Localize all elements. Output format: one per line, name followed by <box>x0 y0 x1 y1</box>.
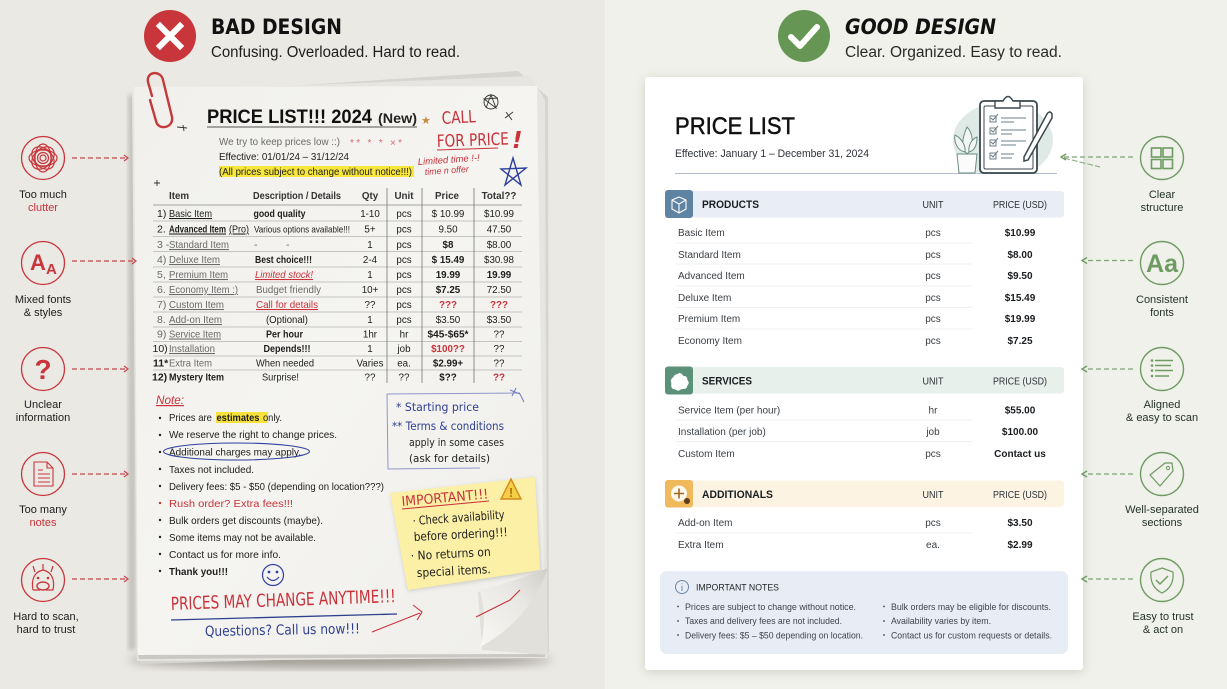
icon: smiley <box>262 564 284 586</box>
messy notes list: Thank you!!! <box>169 566 228 578</box>
product rows: pcs <box>925 336 941 347</box>
table rows: pcs <box>396 255 412 266</box>
table rows: ea. <box>397 358 411 370</box>
messy table <box>152 188 522 384</box>
clean title: PRICE LIST <box>675 113 795 140</box>
callout: sticky note <box>390 477 541 591</box>
messy subtitle block: (All prices subject to change without notice!!!) <box>219 166 412 178</box>
product rows: $9.50 <box>1007 271 1033 282</box>
callout: mixed fonts: A <box>30 250 46 275</box>
callout: terms box: * Starting price <box>396 400 479 414</box>
callout: important notes: Contact us for custom requests or details. <box>891 630 1052 642</box>
table header row: Description / Details <box>253 191 342 202</box>
product rows: $15.49 <box>1005 293 1036 304</box>
table header row: Unit <box>394 191 414 202</box>
table rows: 9) <box>157 328 166 340</box>
table rows: Various options available!!! <box>254 224 350 234</box>
table rows: pcs <box>396 300 412 311</box>
section header: services: UNIT <box>922 376 944 388</box>
table rows: ?? <box>365 372 376 384</box>
callout: well-separated sections: Well-separated <box>1125 504 1199 516</box>
section header: services <box>665 366 1064 394</box>
callout: hard to scan: hard to trust <box>17 624 75 636</box>
table rows: hr <box>400 330 409 340</box>
messy title: (New) <box>378 110 417 126</box>
callout: unclear information: ? <box>34 354 52 385</box>
table rows: 5, <box>157 269 166 281</box>
handwritten: call for price: FOR PRICE <box>436 129 509 152</box>
messy subtitle block <box>219 136 414 178</box>
callout: too much clutter <box>19 136 128 214</box>
callout: unclear information <box>16 348 128 424</box>
callout: important notes: Taxes and delivery fees are not included. <box>685 616 842 627</box>
callout: clear structure <box>1061 136 1184 214</box>
service rows: Contact us <box>994 449 1046 460</box>
table rows: $3.50 <box>487 315 512 326</box>
callout: easy to trust <box>1082 558 1194 636</box>
callout: terms box <box>387 388 524 469</box>
table header row: Qty <box>362 191 379 202</box>
callout: important notes: IMPORTANT NOTES <box>696 582 779 594</box>
table rows: 1 <box>367 315 373 326</box>
panel: messy paper price list <box>128 71 552 668</box>
messy notes list: only. <box>263 412 282 424</box>
table rows: ??? <box>490 300 508 311</box>
callout: important notes: Bulk orders may be eligible for discounts. <box>891 602 1051 613</box>
section header: products <box>665 190 1064 218</box>
callout: too much clutter: Too much <box>19 189 67 201</box>
additional rows: ea. <box>926 540 940 551</box>
table rows: Advanced Item <box>169 224 226 236</box>
product rows: pcs <box>925 250 941 261</box>
header: bad design: BAD DESIGN <box>211 15 342 39</box>
callout: sticky note: IMPORTANT!!! <box>401 486 489 510</box>
curled page corner <box>478 568 548 655</box>
service rows: Service Item (per hour) <box>678 406 780 416</box>
table rows: 2-4 <box>363 255 378 266</box>
table rows: Basic Item <box>169 208 212 220</box>
table rows: pcs <box>396 209 412 220</box>
service rows: $55.00 <box>1005 406 1036 416</box>
table rows: ?? <box>494 358 505 370</box>
product rows: Standard Item <box>678 250 741 261</box>
table rows: 8. <box>157 314 166 326</box>
callout: important notes: Availability varies by item. <box>891 616 991 627</box>
product rows: Advanced Item <box>678 271 745 282</box>
table rows: ?? <box>399 372 410 384</box>
callout: sticky note: special items. <box>416 562 491 580</box>
panel: clean price list <box>645 77 1083 672</box>
icon: clipboard and plant illustration <box>953 96 1053 173</box>
service rows: hr <box>929 406 938 416</box>
table rows <box>152 208 515 384</box>
callout: too many notes <box>19 452 128 529</box>
product rows: Economy Item <box>678 336 742 347</box>
additional rows: pcs <box>925 518 941 529</box>
messy notes list: Delivery fees: $5 - $50 (depending on location???) <box>169 481 384 493</box>
table rows: Call for details <box>256 299 318 311</box>
table rows: $8 <box>443 240 454 251</box>
table rows: Limited stock! <box>255 269 313 281</box>
table rows: Service Item <box>169 328 221 340</box>
callout: mixed fonts: & styles <box>24 307 63 319</box>
section header: additionals: UNIT <box>922 489 944 501</box>
callout: terms box: (ask for details) <box>409 452 490 465</box>
messy notes list <box>156 393 384 578</box>
callout: well-separated sections: sections <box>1142 517 1183 529</box>
table rows: good quality <box>254 208 306 220</box>
table header row: Item <box>169 191 189 202</box>
callout: clear structure: structure <box>1141 202 1183 214</box>
service rows <box>676 406 1046 460</box>
messy subtitle block: Effective: 01/01/24 – 31/12/24 <box>219 151 349 163</box>
service rows: $100.00 <box>1002 427 1039 438</box>
table rows: $ 10.99 <box>432 209 464 220</box>
table header row: Price <box>435 191 460 202</box>
table rows: pcs <box>396 270 412 281</box>
table rows: 7) <box>157 299 166 311</box>
section header: products: PRODUCTS <box>702 199 759 211</box>
table rows: 1) <box>157 208 166 220</box>
callout: consistent fonts <box>1082 242 1188 319</box>
table rows: 12) <box>152 372 167 384</box>
table rows: ?? <box>493 372 505 384</box>
messy notes list: Rush order? Extra fees!!! <box>169 498 293 510</box>
table rows: 19.99 <box>487 270 512 281</box>
handwritten: call for price <box>417 107 522 177</box>
table rows: 72.50 <box>487 285 512 296</box>
product rows: pcs <box>925 228 941 239</box>
product rows: pcs <box>925 293 941 304</box>
callout: unclear information: Unclear <box>24 399 62 411</box>
callout: unclear information: information <box>16 412 70 424</box>
table rows: 4) <box>157 254 166 266</box>
messy notes list: Prices are <box>169 412 212 424</box>
additional rows: $3.50 <box>1007 518 1033 529</box>
callout: mixed fonts: A <box>46 261 57 278</box>
table rows: 3 - <box>157 239 170 251</box>
table rows: $3.50 <box>436 315 461 326</box>
messy subtitle block: ** * * ×* <box>350 138 402 149</box>
table rows: Economy Item :) <box>169 284 238 296</box>
callout: important notes <box>660 571 1068 654</box>
table rows: 5+ <box>364 224 376 236</box>
callout: sticky note: before ordering!!! <box>413 525 508 544</box>
product rows: Deluxe Item <box>678 293 731 304</box>
icon: paper clip <box>148 73 172 127</box>
product rows: $10.99 <box>1005 228 1036 239</box>
table rows: 1 <box>367 240 373 251</box>
callout: sticky note: · Check availability <box>412 508 505 528</box>
handwritten: prices may change: Questions? Call us now!!! <box>205 621 360 640</box>
product rows <box>675 228 1036 347</box>
table rows: ?? <box>365 300 376 311</box>
table rows: Installation <box>169 343 215 355</box>
product rows: Basic Item <box>678 228 725 239</box>
header: bad design <box>144 10 460 62</box>
table rows: Add-on Item <box>169 314 222 326</box>
callout: consistent fonts: Consistent <box>1136 294 1188 306</box>
callout: aligned and easy to scan: Aligned <box>1144 399 1180 411</box>
messy notes list: Taxes not included. <box>169 464 254 476</box>
table rows: 47.50 <box>487 224 512 236</box>
table rows: - <box>286 239 290 251</box>
table rows: 9.50 <box>438 224 458 236</box>
table rows: ?? <box>494 330 505 340</box>
callout: too many notes: notes <box>30 517 57 529</box>
callout: too many notes: Too many <box>19 504 67 516</box>
section header: products: PRICE (USD) <box>993 199 1047 211</box>
callout: hard to scan: Hard to scan, <box>13 611 79 623</box>
callout: sticky note: ! <box>509 485 513 500</box>
table header row <box>169 191 516 202</box>
icon: blue star doodle <box>501 158 526 185</box>
table rows: (Pro) <box>229 224 249 236</box>
table rows: Custom Item <box>169 299 224 311</box>
handwritten: call for price: CALL <box>441 107 477 129</box>
arrow: red doodle <box>372 590 520 632</box>
callout: aligned and easy to scan: & easy to scan <box>1126 412 1198 424</box>
messy title: ★ <box>421 115 431 127</box>
header: good design <box>778 10 1062 62</box>
callout: mixed fonts: Mixed fonts <box>15 294 72 306</box>
section header: products: UNIT <box>922 199 944 211</box>
handwritten: call for price: ! <box>512 128 522 154</box>
table rows: 1hr <box>363 330 378 340</box>
table rows: $2.99+ <box>433 358 463 370</box>
table rows: 6. <box>157 284 166 296</box>
table grid <box>153 188 522 383</box>
callout: sticky note: · No returns on <box>410 545 491 563</box>
messy notes list: We reserve the right to change prices. <box>169 429 337 441</box>
service rows: pcs <box>925 449 941 460</box>
section header: additionals: ADDITIONALS <box>702 489 773 501</box>
messy notes list: Some items may not be available. <box>169 532 316 544</box>
product rows: Premium Item <box>678 314 740 325</box>
product rows: $8.00 <box>1007 250 1033 261</box>
table rows: 1-10 <box>360 209 380 220</box>
table rows: $100?? <box>431 344 465 355</box>
callout: well-separated sections <box>1082 452 1199 529</box>
table rows: When needed <box>256 358 314 370</box>
table rows: 1 <box>367 270 373 281</box>
table rows: 11* <box>153 358 169 370</box>
messy notes list: Bulk orders get discounts (maybe). <box>169 515 323 527</box>
header: good design: GOOD DESIGN <box>845 15 996 39</box>
callout: terms box: ** Terms & conditions <box>392 419 504 433</box>
table rows: $30.98 <box>484 255 515 266</box>
table rows: $8.00 <box>487 240 512 251</box>
callout: too much clutter: clutter <box>28 202 58 214</box>
table rows: Best choice!!! <box>255 254 312 266</box>
clean title <box>675 113 1057 174</box>
messy subtitle block: We try to keep prices low ::) <box>219 136 340 148</box>
additional rows <box>676 518 1033 551</box>
additional rows: Add-on Item <box>678 518 732 529</box>
table rows: Premium Item <box>169 269 228 281</box>
header: good design: Clear. Organized. Easy to read. <box>845 44 1062 61</box>
table rows: (Optional) <box>266 314 308 326</box>
table rows: - <box>254 239 258 251</box>
messy notes list: Additional charges may apply. <box>169 446 301 458</box>
table rows: Standard Item <box>169 239 229 251</box>
table rows: $ 15.49 <box>432 255 465 266</box>
service rows: Installation (per job) <box>678 427 766 438</box>
handwritten: call for price: Limited time !-! <box>417 153 480 168</box>
handwritten: prices may change <box>170 586 397 640</box>
table rows: Mystery Item <box>169 372 224 384</box>
messy notes list: Contact us for more info. <box>169 549 281 561</box>
product rows: $7.25 <box>1007 336 1033 347</box>
table rows: $10.99 <box>484 209 514 220</box>
table rows: Extra Item <box>169 358 212 370</box>
clean title: Effective: January 1 – December 31, 2024 <box>675 148 869 160</box>
callout: hard to scan <box>13 558 128 636</box>
header: bad design: Confusing. Overloaded. Hard to read. <box>211 44 460 61</box>
table rows: 2. <box>157 224 166 236</box>
table rows: ??? <box>439 300 457 311</box>
section header: services: SERVICES <box>702 376 752 388</box>
callout: consistent fonts: Aa <box>1146 250 1179 278</box>
callout: important notes: Delivery fees: $5 – $50 depending on location. <box>685 630 863 642</box>
product rows: pcs <box>925 314 941 325</box>
service rows: Custom Item <box>678 449 735 460</box>
table rows: 19.99 <box>436 270 461 281</box>
messy notes list: estimates <box>216 412 260 424</box>
table rows: Budget friendly <box>256 284 322 296</box>
callout: terms box: apply in some cases <box>409 436 504 449</box>
icon: doodle scribble <box>154 95 513 186</box>
additional rows: $2.99 <box>1007 540 1033 551</box>
table rows: 1 <box>367 344 373 355</box>
table rows: Per hour <box>266 328 303 340</box>
callout: mixed fonts <box>15 242 136 319</box>
messy notes list: Note: <box>156 393 184 407</box>
table rows: $?? <box>439 372 457 384</box>
table header row: Total?? <box>482 191 516 202</box>
product rows: $19.99 <box>1005 314 1036 325</box>
service rows: job <box>925 427 940 438</box>
handwritten: call for price: time n offer <box>424 164 470 177</box>
callout: clear structure: Clear <box>1149 189 1175 201</box>
table rows: job <box>396 344 411 355</box>
table rows: Deluxe Item <box>169 254 220 266</box>
section header: services: PRICE (USD) <box>993 376 1047 388</box>
additional rows: Extra Item <box>678 540 724 551</box>
table rows: Depends!!! <box>264 343 310 355</box>
table rows: $7.25 <box>436 285 461 296</box>
table rows: pcs <box>396 224 412 236</box>
callout: consistent fonts: fonts <box>1150 307 1174 319</box>
section header: additionals <box>665 480 1064 508</box>
table rows: pcs <box>396 240 412 251</box>
callout: important notes: Prices are subject to change without notice. <box>685 602 856 613</box>
section header: additionals: PRICE (USD) <box>993 489 1047 501</box>
table rows: Varies <box>356 358 384 370</box>
table rows: pcs <box>396 285 412 296</box>
table rows: ?? <box>494 344 505 355</box>
table rows: pcs <box>396 315 412 326</box>
handwritten: prices may change: PRICES MAY CHANGE ANYTIME!!! <box>170 586 396 615</box>
product rows: pcs <box>925 271 941 282</box>
messy title: PRICE LIST!!! 2024 <box>207 106 372 128</box>
table rows: 10+ <box>362 285 379 296</box>
table rows: $45-$65* <box>428 330 469 340</box>
callout: aligned and easy to scan <box>1082 348 1198 424</box>
callout: easy to trust: Easy to trust <box>1132 611 1194 623</box>
table rows: Surprise! <box>262 372 299 384</box>
callout: easy to trust: & act on <box>1143 624 1183 636</box>
table rows: 10) <box>152 343 168 355</box>
